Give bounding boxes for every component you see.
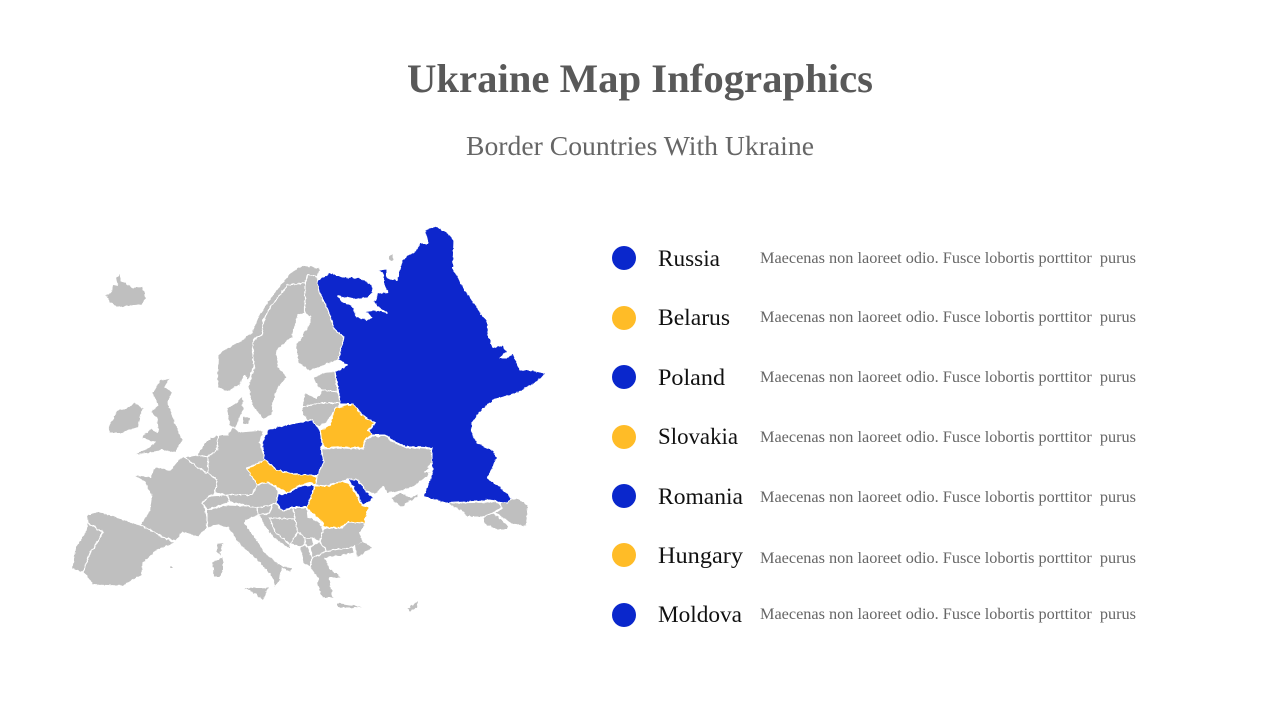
Romania	[307, 481, 369, 528]
legend row: Moldova	[612, 602, 1136, 627]
legend row: Russia: Maecenas non laoreet odio. Fusce lobortis porttitor purus	[760, 250, 1136, 267]
legend row: Poland	[612, 365, 1136, 390]
Russia	[317, 226, 545, 503]
legend row: Hungary	[612, 543, 1136, 568]
legend row: Moldova: Moldova	[658, 602, 742, 627]
legend row: Belarus	[612, 305, 1136, 330]
legend row: Romania	[612, 484, 1136, 509]
legend row: Russia: Russia	[658, 246, 720, 271]
title: Ukraine Map Infographics	[407, 56, 873, 101]
Hungary	[276, 485, 317, 511]
Poland	[262, 420, 324, 476]
legend row: Romania: Romania	[658, 484, 743, 509]
Slovakia	[247, 460, 317, 493]
legend row: Romania: Maecenas non laoreet odio. Fusce lobortis porttitor purus	[760, 489, 1136, 506]
legend row: Hungary: Maecenas non laoreet odio. Fusce lobortis porttitor purus	[760, 550, 1136, 567]
legend row: Slovakia: Maecenas non laoreet odio. Fusce lobortis porttitor purus	[760, 429, 1136, 446]
Belarus	[320, 404, 375, 448]
legend row: Moldova: Maecenas non laoreet odio. Fusce lobortis porttitor purus	[760, 606, 1136, 623]
legend row: Poland: Maecenas non laoreet odio. Fusce lobortis porttitor purus	[760, 369, 1136, 386]
map of Europe	[72, 226, 545, 611]
grey countries	[72, 254, 528, 611]
legend row: Russia	[612, 246, 1136, 271]
legend row: Belarus: Belarus	[658, 305, 730, 330]
legend row: Slovakia: Slovakia	[658, 424, 738, 449]
Moldova	[348, 479, 374, 506]
legend row: Belarus: Maecenas non laoreet odio. Fusce lobortis porttitor purus	[760, 309, 1136, 326]
subtitle: Border Countries With Ukraine	[466, 131, 814, 161]
legend row: Poland: Poland	[658, 365, 726, 390]
legend row: Slovakia	[612, 424, 1136, 449]
legend row: Hungary: Hungary	[658, 543, 744, 568]
